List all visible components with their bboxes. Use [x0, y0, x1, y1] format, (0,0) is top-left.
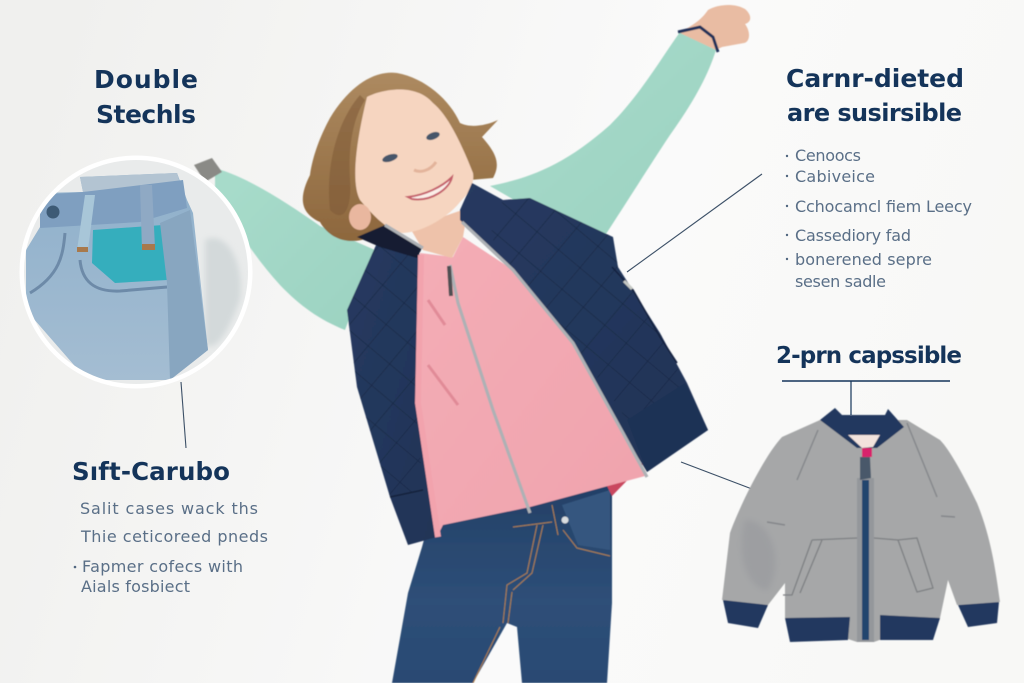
- cuffs: [723, 600, 768, 628]
- eyes: [381, 130, 441, 164]
- text block: top right bullets: [786, 146, 972, 291]
- text block: top right bullets: bonerened sepre: [795, 250, 932, 269]
- hair shading: [329, 95, 365, 215]
- jacket product: [722, 408, 1000, 642]
- vest left collar: [357, 225, 422, 258]
- nose: [414, 162, 436, 171]
- text block: top right bullets: Cassediory fad: [795, 226, 911, 245]
- inset circle: jeans detail: [20, 150, 255, 390]
- right sleeve: [490, 32, 716, 234]
- vest pocket zipper: [612, 267, 677, 363]
- leader lines: [181, 174, 950, 489]
- back waistband: [80, 173, 182, 192]
- pocket seam: [80, 260, 167, 291]
- right cuff: [678, 27, 718, 52]
- heading: double stitch: Double: [94, 65, 198, 94]
- red shirt sliver: [604, 462, 645, 496]
- heading: jacket: 2-prn capssible: [776, 343, 962, 369]
- vest right panel: [460, 183, 708, 472]
- text block: top right bullets: sesen sadle: [795, 272, 886, 291]
- text block: top right bullets: Cabiveice: [795, 167, 875, 186]
- text block: bottom left: Thie ceticoreed pneds: [80, 527, 268, 546]
- shirt folds: [428, 300, 458, 405]
- side panel: [160, 210, 208, 380]
- smile: [408, 177, 452, 199]
- left cuff: [194, 158, 222, 182]
- zipper tape: [857, 478, 874, 642]
- sleeve shading: [742, 520, 775, 590]
- child figure: [194, 5, 750, 683]
- zippers: [385, 222, 647, 513]
- vest right hem: [627, 383, 708, 472]
- jacket silhouette: [722, 420, 1000, 642]
- pink shirt: [417, 237, 645, 537]
- jeans: [392, 478, 612, 683]
- button: [46, 206, 60, 218]
- hair: [303, 73, 498, 241]
- text block: bottom left: Salit cases wack ths: [80, 499, 258, 518]
- collar: [820, 408, 904, 448]
- teal pocket: [92, 225, 167, 283]
- zipper top: [862, 448, 872, 457]
- neck: [410, 208, 468, 258]
- ear: [349, 204, 371, 230]
- side seam: [30, 233, 65, 293]
- heading: bottom left: Sıft-Carubo: [72, 457, 230, 486]
- haze: [24, 160, 248, 384]
- waistband: [40, 180, 187, 228]
- jeans hip highlight: [562, 490, 610, 550]
- hem: [785, 617, 850, 642]
- jeans stitching: [473, 505, 610, 683]
- belt loops: [77, 195, 95, 250]
- heading: top right: Carnr-dieted: [786, 64, 964, 93]
- text block: bottom left: Fapmer cofecs with: [82, 557, 243, 576]
- heading: double stitch line 2: Stechls: [96, 100, 196, 129]
- face: [355, 89, 473, 233]
- jeans body: [26, 173, 208, 380]
- jeans button: [562, 516, 568, 524]
- label: [848, 435, 880, 448]
- seams: [767, 423, 955, 525]
- text block: top right bullets: Cchocamcl fiem Leecy: [795, 197, 972, 216]
- text block: bottom left: Aials fosbiect: [81, 577, 190, 596]
- vest left hem seam: [390, 490, 423, 497]
- vest left panel: [347, 225, 437, 545]
- heading: top right: [786, 64, 964, 127]
- text block: top right bullets: Cenoocs: [795, 146, 861, 165]
- left sleeve: [215, 168, 375, 330]
- heading: top right: are susirsible: [787, 99, 962, 127]
- pink facing strip: [418, 255, 438, 537]
- pockets: [783, 538, 933, 595]
- vest pocket pull: [624, 281, 632, 289]
- zipper pull: [449, 266, 451, 296]
- hand: [680, 5, 750, 50]
- text block: bottom left: [74, 499, 268, 596]
